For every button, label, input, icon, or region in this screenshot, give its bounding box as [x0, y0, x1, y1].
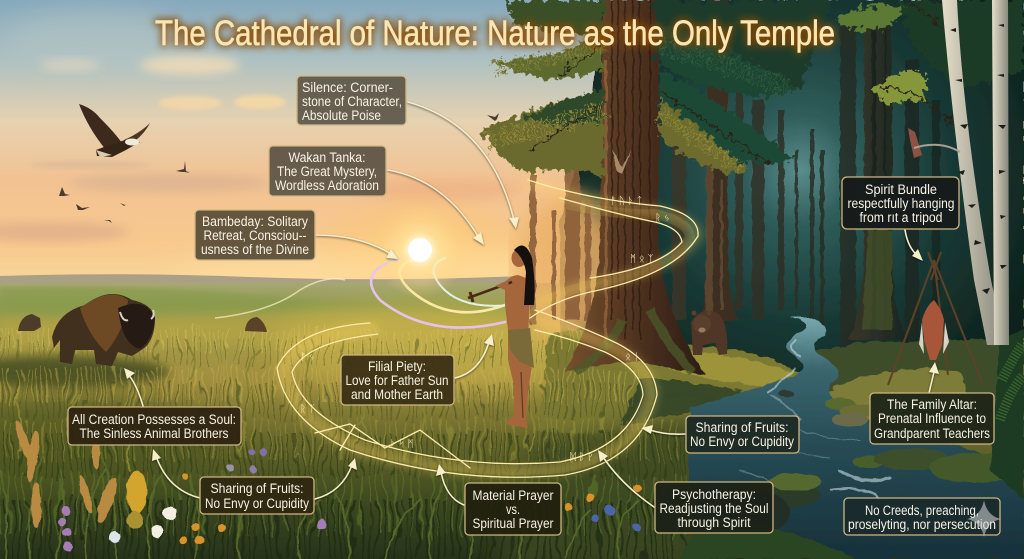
ribbon runes: ᚠ ᚢ ᚦ ᛏ	[610, 196, 642, 207]
ribbon runes: ᛟ ᚾ	[625, 352, 640, 363]
river rocks and mossy banks	[680, 330, 1024, 559]
callout: sharing of fruits, left: No Envy or Cupidity	[205, 496, 310, 512]
callout: filial piety: Filial Piety:	[368, 359, 426, 375]
callout: silence: Absolute Poise	[302, 108, 381, 124]
callout: bambeday	[195, 210, 315, 260]
ribbon runes	[300, 196, 670, 463]
ferns right of the river	[1000, 345, 1024, 420]
icon: sparkle watermark	[967, 500, 1001, 537]
callout: spirit bundle: respectfully hanging	[848, 196, 954, 212]
callout: no creeds	[844, 498, 1000, 535]
tripod with spirit bundle	[888, 252, 982, 385]
callout: material prayer: Spiritual Prayer	[472, 516, 554, 532]
arrow: wakan tanka	[388, 170, 484, 245]
arrow: sharing to all creation	[152, 449, 200, 498]
bear	[691, 310, 727, 355]
background: distant hills and prairie	[0, 274, 1024, 559]
perched bird	[908, 128, 960, 158]
callout: silence	[297, 76, 406, 125]
title: The Cathedral of Nature: Nature as the Only Temple	[155, 14, 835, 53]
main bison	[52, 294, 155, 366]
arrow: material prayer	[436, 464, 464, 505]
small birds	[59, 113, 499, 223]
callout: psychotherapy	[655, 482, 773, 533]
callout: material prayer: vs.	[506, 502, 520, 518]
title: The Cathedral of Nature: Nature as the Only Temple	[155, 14, 835, 53]
callout: psychotherapy: Psychotherapy:	[672, 487, 756, 503]
callout: bambeday: Retreat, Consciou--	[204, 228, 307, 244]
foreground grasses and wildflowers	[0, 340, 641, 559]
arrow: sharing right	[641, 425, 685, 434]
ribbon runes: ᚱ ᛃ	[655, 213, 670, 224]
callout: no creeds: No Creeds, preaching,	[865, 503, 979, 519]
callout: all creation: The Sinless Animal Brothers	[80, 426, 228, 442]
callout: bambeday: Bambeday: Solitary	[202, 214, 309, 230]
callout: filial piety: and Mother Earth	[351, 387, 443, 403]
callout: bambeday: usness of the Divine	[201, 242, 309, 258]
callout: silence: Silence: Corner-	[302, 80, 393, 96]
callout: all creation: All Creation Possesses a Soul:	[72, 412, 236, 428]
river highlights	[740, 340, 890, 500]
arrow: psychotherapy	[598, 450, 654, 507]
pastel light rings around the sun	[371, 258, 510, 328]
ribbon glow	[282, 182, 697, 472]
callout: family altar	[870, 393, 994, 444]
callout: sharing of fruits, left	[200, 477, 314, 514]
callout: wakan tanka: Wakan Tanka:	[288, 150, 366, 166]
pine canopy	[480, 0, 1024, 178]
arrow: silence	[408, 102, 519, 229]
ribbon runes: ᚦ ᛋ ᛗ	[390, 438, 414, 450]
callout: sharing of fruits, right	[686, 416, 799, 453]
callout: material prayer: Material Prayer	[472, 488, 554, 504]
callout: wakan tanka	[269, 146, 386, 196]
callout: wakan tanka: Wordless Adoration	[275, 178, 379, 194]
prairie grass texture	[0, 340, 690, 530]
callout: family altar: Prenatal Influence to	[878, 411, 986, 427]
eagle	[79, 104, 150, 157]
callout: no creeds: proselyting, nor persecution	[848, 517, 996, 533]
ribbon runes: ᚱ ᛉ	[300, 404, 315, 415]
arrow: filial piety	[455, 334, 494, 378]
callout: psychotherapy: through Spirit	[678, 515, 751, 531]
faint light trail across the prairie	[215, 279, 345, 318]
callout: filial piety: Love for Father Sun	[346, 373, 448, 389]
arrow: family altar	[929, 362, 939, 393]
river	[688, 316, 1024, 559]
ribbon runes: ᛗ ᛟ ᛉ	[630, 254, 654, 265]
callout: sharing of fruits, right: No Envy or Cupidity	[690, 434, 795, 450]
birch trees	[942, 0, 1009, 345]
callout: sharing of fruits, right: Sharing of Fruits:	[696, 420, 788, 436]
tree moth carving	[612, 148, 632, 174]
far bison	[18, 314, 267, 332]
callout: spirit bundle: Spirit Bundle	[865, 182, 937, 198]
background: forest	[512, 0, 1024, 390]
background: forest floor and banks	[500, 329, 1024, 559]
callout: psychotherapy: Readjusting the Soul	[660, 501, 768, 517]
callout: spirit bundle: from rıt a tripod	[860, 210, 942, 226]
callout: sharing of fruits, left: Sharing of Fruits:	[210, 481, 304, 497]
callout arrows	[124, 102, 939, 507]
ribbon runes: ᚠ ᛃ	[300, 352, 315, 363]
callout: all creation	[68, 407, 241, 445]
ribbon band fill	[284, 203, 690, 470]
glowing spiral ribbon	[277, 180, 698, 477]
ribbon outlines	[277, 180, 698, 477]
arrow: spirit bundle	[905, 230, 923, 261]
callout: wakan tanka: The Great Mystery,	[277, 164, 377, 180]
callout: silence: stone of Character,	[302, 94, 402, 110]
callout: filial piety	[341, 355, 454, 405]
standing figure with pipe	[468, 246, 535, 428]
callout: family altar: Grandparent Teachers	[874, 426, 990, 442]
callout: spirit bundle	[842, 177, 959, 229]
ribbon runes: ᛞ ᛒ ᚹ	[570, 452, 594, 463]
background: sunset sky	[0, 0, 1024, 310]
arrow: all creation	[124, 368, 143, 406]
callout: material prayer	[465, 483, 561, 535]
arrow: sharing to ribbon	[315, 458, 357, 499]
arrow: bambeday	[316, 235, 398, 259]
callout: family altar: The Family Altar:	[887, 397, 977, 413]
big redwood tree	[565, 0, 706, 375]
sun	[372, 202, 468, 298]
